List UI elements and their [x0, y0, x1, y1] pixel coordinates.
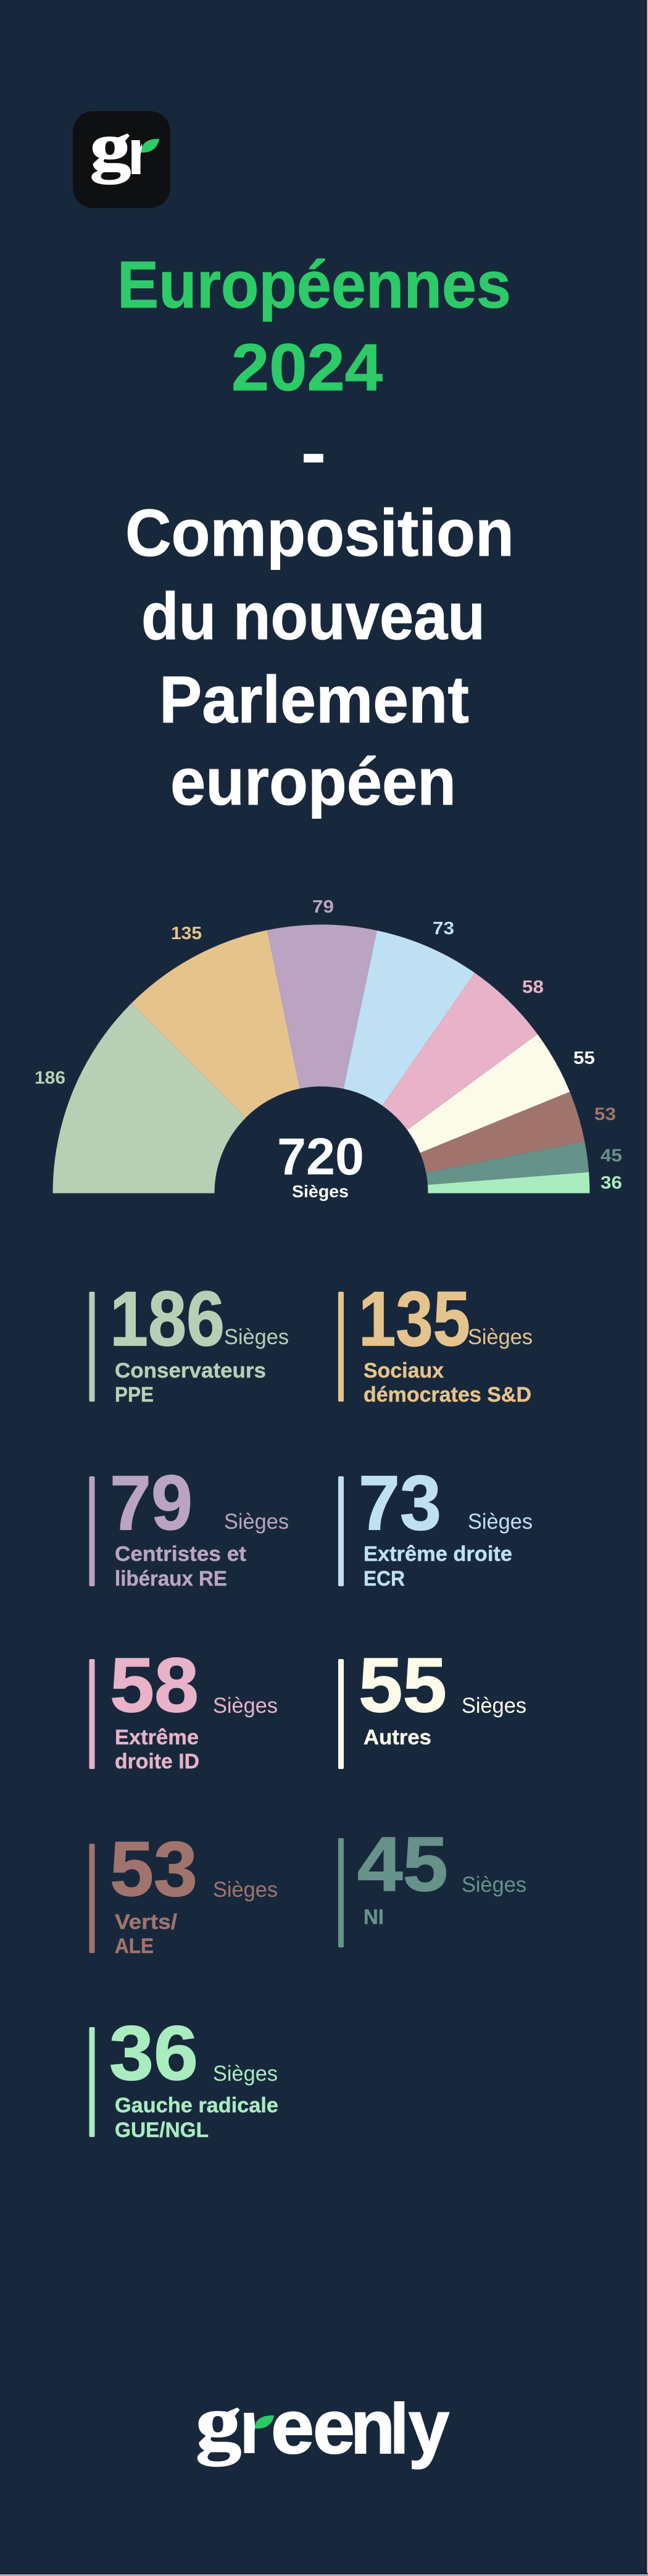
chart value labels: 79 [312, 897, 334, 917]
title: du nouveau [141, 579, 485, 653]
legend item: 186 Conservateurs PPE [89, 1276, 289, 1407]
legend item: 79 Centristes et libéraux RE [89, 1460, 289, 1591]
legend item: 73 Extrême droite ECR: Extrême droite [363, 1542, 512, 1566]
legend item: 73 Extrême droite ECR [338, 1460, 533, 1591]
icon: greenly app logo [73, 109, 170, 208]
legend item: 79 Centristes et libéraux RE: Sièges [224, 1510, 289, 1534]
legend item: 45 NI: Sièges [462, 1873, 526, 1897]
legend item: 53 Verts/ALE: ALE [115, 1934, 154, 1958]
chart total: 720 [277, 1127, 364, 1186]
title: Européennes [117, 247, 511, 322]
legend item: 135 Sociaux démocrates S&D [338, 1276, 533, 1407]
legend item: 186 Conservateurs PPE: Conservateurs [115, 1359, 266, 1382]
chart value labels: 135 [171, 924, 202, 943]
legend item: 135 Sociaux démocrates S&D: démocrates S&D [363, 1383, 531, 1407]
legend item: 45 NI: NI [363, 1905, 384, 1929]
segment: 79 RE [267, 925, 377, 1089]
logo: greenly wordmark: g [196, 2378, 241, 2466]
legend item: 135 Sociaux démocrates S&D: Sièges [468, 1325, 533, 1349]
legend item: 79 Centristes et libéraux RE: Centristes et [115, 1542, 246, 1566]
legend item: 186 Conservateurs PPE: Sièges [224, 1325, 289, 1349]
logo: greenly wordmark: e [313, 2385, 355, 2470]
legend item: 73 Extrême droite ECR: Sièges [468, 1510, 533, 1534]
legend item: 36 Gauche radicale GUE/NGL: Gauche radicale [115, 2094, 278, 2117]
title: - [301, 415, 326, 490]
legend item: 79 Centristes et libéraux RE: libéraux RE [115, 1567, 227, 1591]
chart value labels: 45 [600, 1146, 622, 1166]
legend item: 53 Verts/ALE: Verts/ [115, 1910, 178, 1934]
legend item: 186 Conservateurs PPE: PPE [115, 1383, 154, 1407]
logo: greenly wordmark: y [409, 2385, 449, 2470]
legend item: 36 Gauche radicale GUE/NGL: Sièges [213, 2062, 278, 2086]
legend item: 45 NI [338, 1821, 526, 1947]
legend item: 58 Extrême droite ID: Sièges [213, 1694, 278, 1718]
legend item: 55 Autres: 55 [359, 1642, 447, 1728]
legend item: 36 Gauche radicale GUE/NGL [89, 2010, 278, 2142]
legend item: 53 Verts/ALE [89, 1826, 278, 1958]
segment: 186 PPE [53, 1003, 246, 1193]
logo: greenly wordmark [197, 2401, 450, 2470]
legend item: 58 Extrême droite ID: 58 [110, 1642, 199, 1728]
logo: greenly wordmark: r [239, 2385, 268, 2470]
legend item: 36 Gauche radicale GUE/NGL: 36 [109, 2010, 198, 2096]
chart value labels: 58 [522, 977, 544, 997]
legend item: 79 Centristes et libéraux RE: 79 [110, 1460, 193, 1546]
title: 2024 [231, 330, 383, 404]
logo: greenly wordmark: e [271, 2385, 314, 2470]
legend item: 135 Sociaux démocrates S&D: Sociaux [363, 1359, 444, 1382]
title: européen [170, 744, 456, 819]
chart value labels: 55 [573, 1048, 595, 1068]
legend item: 73 Extrême droite ECR: ECR [363, 1567, 405, 1591]
segment: 73 ECR [343, 930, 475, 1106]
chart value labels: 186 [35, 1068, 65, 1088]
chart value labels: 73 [433, 919, 454, 939]
icon: greenly app logo: r [127, 117, 152, 188]
segment: 55 Autres [407, 1034, 570, 1153]
legend item: 73 Extrême droite ECR: 73 [359, 1460, 441, 1546]
legend item: 58 Extrême droite ID [89, 1642, 278, 1773]
chart value labels [35, 897, 622, 1193]
title: Parlement [159, 662, 469, 737]
title: Composition [125, 495, 514, 570]
segment: 36 GUE/NGL [428, 1172, 590, 1193]
segment: 135 S&D [131, 930, 300, 1118]
segment: 45 NI [426, 1142, 589, 1185]
legend item: 58 Extrême droite ID: Extrême [115, 1726, 199, 1749]
chart value labels: 53 [594, 1105, 616, 1124]
legend item: 53 Verts/ALE: Sièges [213, 1878, 278, 1902]
logo: greenly wordmark: l [390, 2390, 409, 2469]
segment: 53 Verts/ALE [420, 1092, 584, 1173]
legend item: 45 NI: 45 [357, 1821, 448, 1907]
legend item: 36 Gauche radicale GUE/NGL: GUE/NGL [115, 2118, 209, 2142]
legend item: 53 Verts/ALE: 53 [110, 1826, 197, 1912]
icon: greenly app logo: g [90, 109, 131, 184]
legend item: 55 Autres: Sièges [462, 1694, 526, 1718]
chart: hemicycle of seats [35, 897, 622, 1201]
chart total: Sièges [292, 1182, 349, 1201]
chart value labels: 36 [600, 1173, 622, 1193]
legend item: 186 Conservateurs PPE: 186 [110, 1276, 225, 1362]
legend item: 135 Sociaux démocrates S&D: 135 [359, 1276, 470, 1362]
segment: 58 ID [383, 973, 538, 1130]
title [117, 247, 514, 819]
logo: greenly wordmark: n [351, 2385, 395, 2470]
legend item: 58 Extrême droite ID: droite ID [115, 1750, 199, 1773]
legend item: 55 Autres [338, 1642, 526, 1769]
legend item: 55 Autres: Autres [363, 1726, 431, 1749]
